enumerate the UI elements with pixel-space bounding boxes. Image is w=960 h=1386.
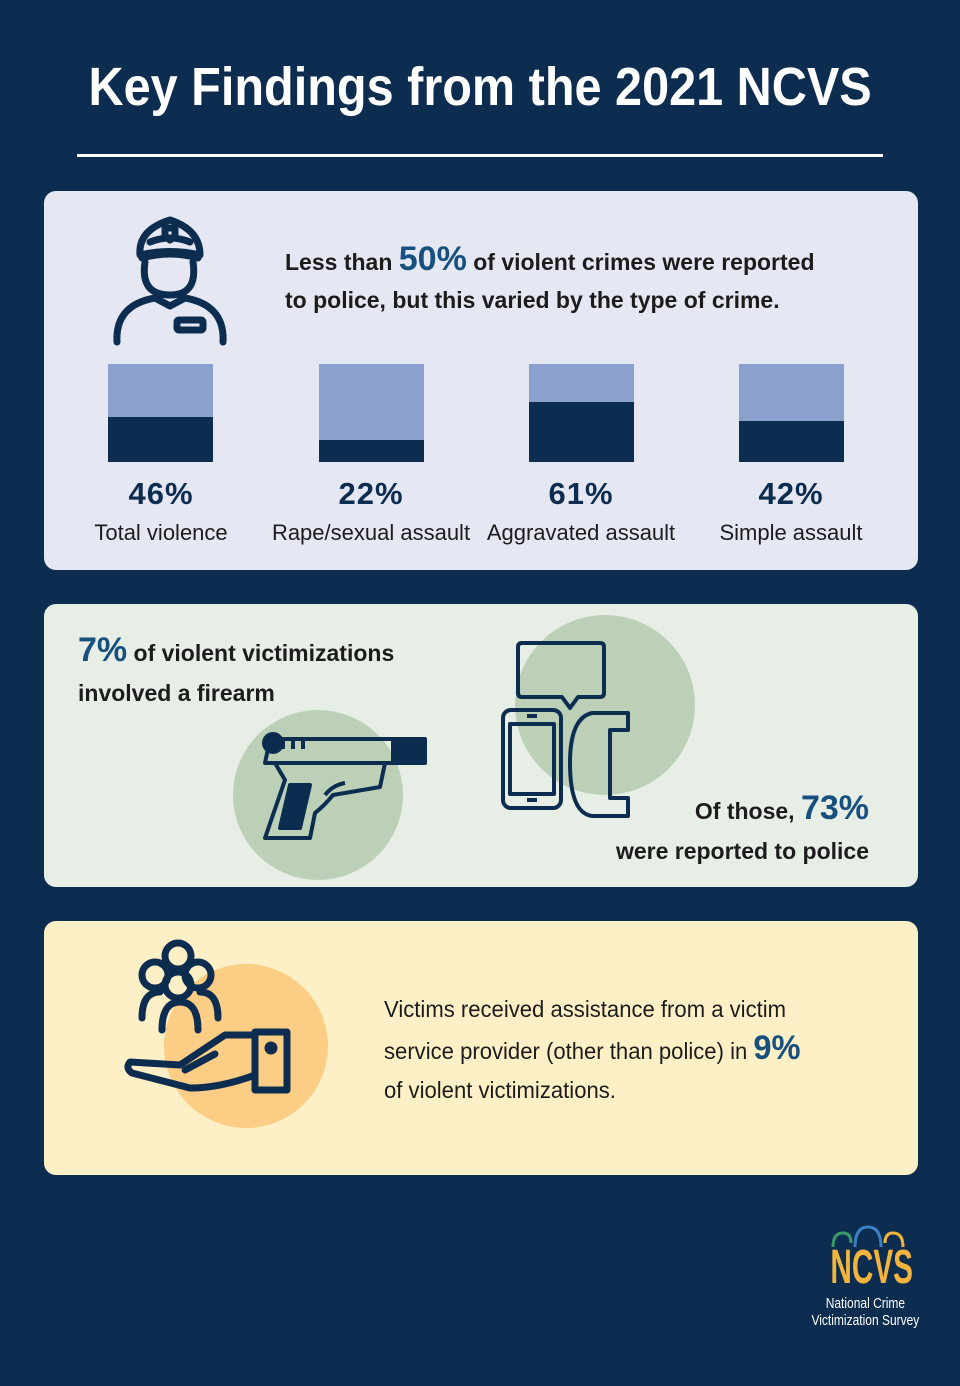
logo: NCVS: Victimization Survey [811, 1312, 919, 1329]
bar chart: Simple assault [719, 520, 863, 545]
icon: phones [501, 641, 630, 818]
icon: hand with people [124, 940, 290, 1094]
text: less than 50%: Less than 50% of violent crimes were reported [285, 240, 814, 278]
logo: NCVS [811, 1226, 920, 1329]
panel: victim services [44, 921, 918, 1175]
bar chart: 46% [128, 476, 194, 511]
text: less than 50%: to police, but this varied by the type of crime. [285, 287, 780, 313]
text: 7% firearm: 7% of violent victimizations [78, 631, 394, 669]
text: victim service provider 9%: Victims received assistance from a victim [384, 996, 786, 1022]
logo: NCVS: National Crime [825, 1295, 905, 1312]
logo: NCVS: NCVS [830, 1241, 913, 1294]
text: 73% reported: Of those, 73% [695, 789, 869, 827]
bar chart: 22% [338, 476, 404, 511]
text: victim service provider 9%: service provider (other than police) in 9% [384, 1029, 801, 1067]
bar chart: 42% [758, 476, 824, 511]
text: victim service provider 9% [384, 996, 801, 1103]
bar chart: Rape/sexual assault [272, 520, 470, 545]
bar chart: Aggravated assault [487, 520, 675, 545]
text: 73% reported [616, 789, 869, 864]
icon: gun [262, 732, 427, 840]
text: 7% firearm [78, 631, 394, 706]
text: victim service provider 9%: of violent victimizations. [384, 1077, 616, 1103]
panel: firearms [44, 604, 918, 887]
bar chart: 61% [548, 476, 614, 511]
panel: reporting by crime type [44, 191, 918, 570]
bar chart [94, 364, 863, 545]
text: 7% firearm: involved a firearm [78, 680, 275, 706]
bar chart: Total violence [94, 520, 228, 545]
text: less than 50% [285, 240, 814, 313]
icon: police officer [113, 216, 227, 346]
title: Key Findings from the 2021 NCVS [88, 57, 872, 117]
text: 73% reported: were reported to police [616, 838, 869, 864]
